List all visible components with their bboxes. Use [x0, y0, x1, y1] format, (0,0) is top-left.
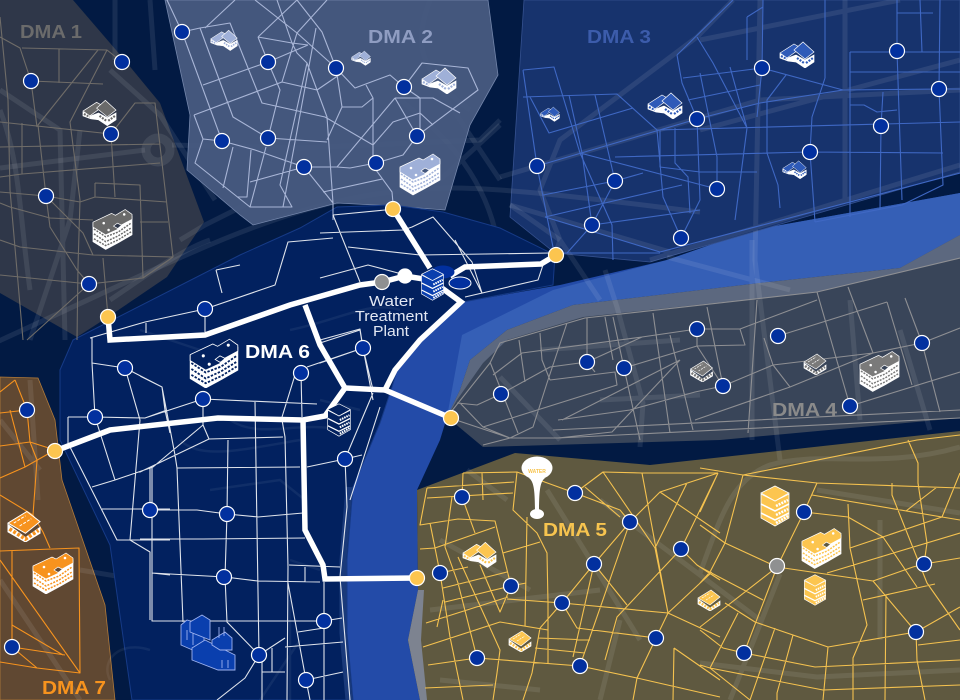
panel: DMA 3 zone [510, 0, 960, 262]
supply nodes: DMA 2 [174, 24, 424, 174]
supply nodes: DMA 7 [4, 402, 34, 654]
label: water treatment plant: Treatment [355, 308, 429, 325]
panel: DMA 7 zone [0, 377, 115, 700]
junction nodes: grey and white [374, 269, 784, 574]
icons: DMA 4 buildings [690, 351, 899, 392]
boundary valves: yellow nodes [48, 202, 564, 586]
DMA 6 street network [68, 210, 550, 700]
icon: water tower [522, 456, 552, 519]
DMA 2 street network [167, 0, 478, 220]
DMA 4 street network [447, 258, 960, 445]
label: water treatment plant [355, 293, 429, 340]
label: water treatment plant: Water [369, 293, 414, 310]
icons: DMA 6 buildings [190, 339, 350, 436]
DMA 3 street network [523, 0, 960, 260]
panel: DMA 6 zone [60, 205, 555, 700]
label: DMA 6: DMA 6 [245, 342, 310, 362]
DMA 1 street network [0, 17, 173, 340]
panel: DMA 1 zone [0, 0, 204, 337]
icon: water tower: WATER [528, 469, 546, 475]
supply nodes: DMA 4 [494, 322, 930, 414]
label: DMA 5: DMA 5 [543, 520, 607, 540]
supply nodes: DMA 1 [24, 54, 130, 292]
label: DMA 1: DMA 1 [20, 22, 82, 42]
panel: DMA 4 zone [447, 235, 960, 447]
supply nodes: DMA 6 [88, 302, 370, 688]
DMA 7 street network [0, 380, 80, 673]
main water pipes [55, 209, 556, 579]
supply nodes: DMA 3 [530, 44, 946, 246]
supply nodes: DMA 5 [432, 486, 932, 674]
label: DMA 7: DMA 7 [42, 678, 106, 698]
label: water treatment plant: Plant [373, 323, 410, 340]
river [347, 193, 960, 700]
DMA 5 street network [420, 435, 960, 700]
icons: DMA 3 buildings [541, 42, 814, 179]
icon: factory [181, 615, 235, 670]
panel: DMA 5 zone [408, 431, 960, 700]
icons: DMA 2 buildings [211, 30, 456, 195]
icons: DMA 1 buildings [83, 100, 132, 249]
icon: water treatment plant [422, 266, 471, 300]
icons: DMA 7 buildings [8, 511, 73, 594]
panel: DMA 2 zone [165, 0, 498, 225]
label: DMA 3: DMA 3 [587, 27, 651, 47]
label: DMA 2: DMA 2 [368, 27, 433, 47]
label: DMA 4: DMA 4 [772, 400, 837, 420]
icons: DMA 5 buildings [463, 486, 841, 652]
